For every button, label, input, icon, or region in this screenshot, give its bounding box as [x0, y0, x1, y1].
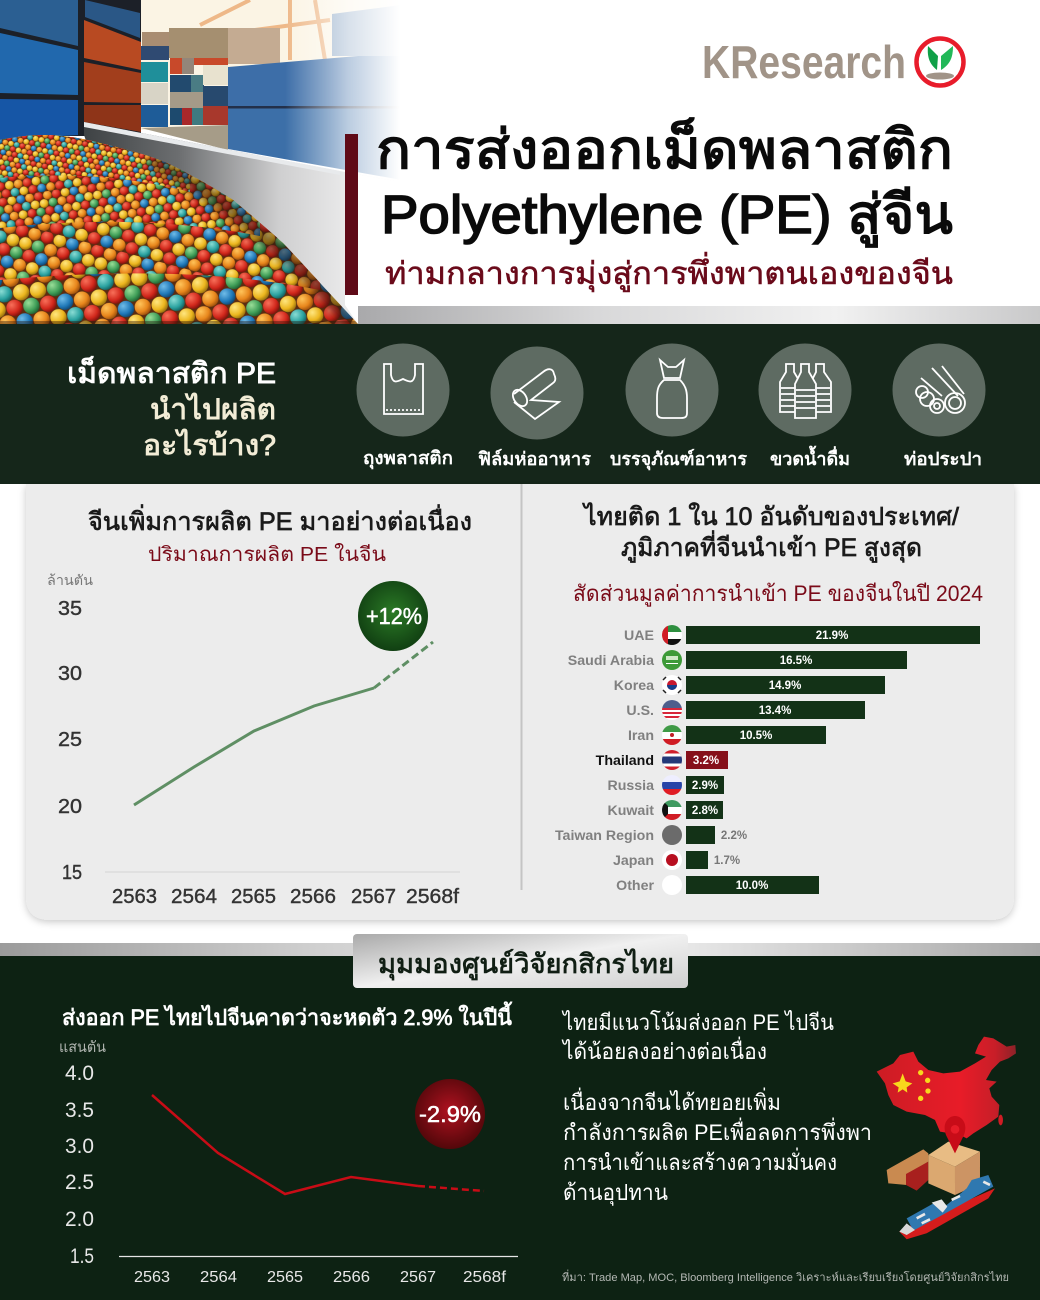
icon: water pipes	[892, 344, 986, 436]
text block: outlook: การนำเข้าและสร้างความมั่นคง	[563, 1147, 837, 1175]
line chart: China PE production: 2563	[112, 886, 157, 908]
icon labels: ถุงพลาสติก	[363, 448, 453, 470]
line chart: China PE production: 20	[58, 796, 82, 818]
panel: KResearch view	[0, 956, 1040, 1300]
illustration: China map, parcel and cargo ship	[877, 1037, 1016, 1239]
line chart: Thai PE exports to China: 3.5	[65, 1099, 94, 1122]
line chart: China PE production: 2564	[171, 886, 217, 908]
line chart: China PE production: ล้านตัน	[47, 572, 93, 588]
value labels: 16.5%	[780, 655, 812, 667]
text block: outlook: ได้น้อยลงอย่างต่อเนื่อง	[561, 1036, 767, 1064]
value labels: 10.0%	[736, 880, 768, 892]
icon labels: ฟิล์มห่ออาหาร	[478, 448, 591, 469]
line chart: China PE production: 2566	[290, 886, 336, 908]
value labels: 2.8%	[692, 805, 718, 817]
line chart: Thai PE exports to China: 3.0	[65, 1135, 94, 1158]
callout: -2.9%: -2.9%	[419, 1101, 481, 1127]
country labels: Korea	[614, 678, 654, 694]
section label: มุมมองศูนย์วิจัยกสิกรไทย	[378, 948, 674, 981]
title: Polyethylene (PE) สู่จีน	[381, 185, 953, 247]
icon: food packaging bag	[626, 344, 718, 436]
chart heading: China production	[88, 504, 472, 566]
icon labels: บรรจุภัณฑ์อาหาร	[610, 448, 747, 471]
text block: outlook	[561, 1010, 872, 1206]
bars	[686, 626, 980, 894]
icon: food wrap film	[490, 346, 584, 440]
section label	[353, 934, 688, 988]
text block: outlook: เนื่องจากจีนได้ทยอยเพิ่ม	[563, 1087, 781, 1115]
line chart: Thai PE exports to China	[59, 1039, 518, 1286]
icon labels	[363, 445, 982, 471]
country labels: Russia	[607, 778, 654, 794]
callout: +12%: +12%	[366, 603, 422, 629]
line chart: Thai PE exports to China: 2567	[400, 1269, 436, 1286]
chart heading: Thailand top 10: ไทยติด 1 ใน 10 อันดับของประเทศ/	[582, 502, 959, 531]
value labels: 13.4%	[759, 705, 791, 717]
chart heading: China production: จีนเพิ่มการผลิต PE มาอย่างต่อเนื่อง	[88, 504, 472, 536]
icon labels: ท่อประปา	[904, 449, 982, 469]
country labels	[555, 628, 654, 894]
line chart: Thai PE exports to China: 2563	[134, 1269, 170, 1286]
line chart: Thai PE exports to China: 2568f	[463, 1269, 507, 1286]
icon: plastic bag	[356, 344, 450, 436]
country labels: Taiwan Region	[555, 828, 654, 844]
line chart: Thai PE exports to China: แสนตัน	[59, 1039, 106, 1056]
subtitle: ท่ามกลางการมุ่งสู่การพึ่งพาตนเองของจีน	[385, 252, 953, 293]
steel band: lower section	[0, 943, 1040, 956]
question heading	[67, 355, 276, 462]
chart heading: Thai exports to China: ส่งออก PE ไทยไปจีนคาดว่าจะหดตัว 2.9% ในปีนี้	[62, 1002, 512, 1030]
text block: outlook: กำลังการผลิต PEเพื่อลดการพึ่งพา	[563, 1117, 872, 1145]
steel band	[358, 306, 1040, 324]
line chart: China PE production: 25	[58, 729, 82, 751]
line chart: China PE production: 2567	[351, 886, 396, 908]
chart heading: China production: ปริมาณการผลิต PE ในจีน	[148, 543, 386, 566]
icon: China map	[877, 1037, 1016, 1138]
value labels: 2.9%	[692, 780, 718, 792]
country labels: Saudi Arabia	[568, 653, 654, 669]
value labels: 3.2%	[693, 755, 719, 767]
value labels: 2.2%	[721, 830, 747, 842]
country labels: Japan	[613, 853, 654, 869]
title accent bar	[345, 134, 358, 295]
line chart: China PE production: 2565	[231, 886, 276, 908]
title: การส่งออกเม็ดพลาสติก	[376, 118, 953, 180]
callout: -2.9%	[415, 1079, 485, 1149]
chart heading: Thailand top 10: สัดส่วนมูลค่าการนำเข้า PE ของจีนในปี 2024	[573, 581, 983, 607]
line chart: Thai PE exports to China: 2566	[333, 1269, 370, 1286]
value labels: 21.9%	[816, 630, 848, 642]
chart heading: Thailand top 10: ภูมิภาคที่จีนนำเข้า PE สูงสุด	[621, 530, 922, 563]
line chart: Thai PE exports to China: 1.5	[70, 1245, 94, 1268]
country labels: UAE	[624, 628, 654, 644]
logo: KResearch: KResearch	[702, 36, 906, 88]
country labels: U.S.	[626, 703, 654, 719]
panel: uses of PE	[0, 324, 1040, 484]
chart heading: Thailand top 10	[573, 502, 983, 607]
line chart: Thai PE exports to China: 4.0	[65, 1062, 94, 1085]
line chart: China PE production: 30	[58, 663, 82, 685]
line chart: Thai PE exports to China: 2.0	[65, 1208, 94, 1231]
line chart: China PE production: 2568f	[406, 886, 459, 908]
value labels: 10.5%	[740, 730, 772, 742]
icon labels: ขวดน้ำดื่ม	[770, 445, 850, 469]
icon: cargo ship	[899, 1175, 995, 1239]
source note: ที่มา: Trade Map, MOC, Bloomberg Intelligence วิเคราะห์และเรียบเรียงโดยศูนย์วิจัยกสิกรไทย	[562, 1269, 1009, 1284]
value labels: 1.7%	[714, 855, 740, 867]
country labels: Other	[616, 878, 654, 894]
hero photo: containers and plastic pellets	[0, 0, 394, 324]
bar chart: share of China's PE imports	[555, 625, 980, 895]
line chart: China PE production: 35	[58, 598, 82, 620]
title	[376, 118, 953, 247]
country labels: Iran	[628, 728, 654, 744]
question heading: นำไปผลิต	[150, 392, 276, 426]
value labels: 14.9%	[769, 680, 801, 692]
flag icons	[662, 625, 682, 895]
icon: parcel box	[928, 1142, 980, 1195]
callout: +12%	[358, 581, 428, 651]
country labels: Kuwait	[607, 803, 654, 819]
line chart: Thai PE exports to China: 2564	[200, 1269, 237, 1286]
text block: outlook: ด้านอุปทาน	[563, 1180, 668, 1206]
question heading: อะไรบ้าง?	[143, 428, 276, 462]
panel: charts	[26, 484, 1014, 920]
icon: water bottles	[758, 344, 852, 436]
line chart: China PE production	[47, 572, 460, 908]
question heading: เม็ดพลาสติก PE	[67, 355, 276, 390]
text block: outlook: ไทยมีแนวโน้มส่งออก PE ไปจีน	[561, 1010, 834, 1035]
line chart: Thai PE exports to China: 2.5	[65, 1171, 94, 1194]
value labels	[692, 630, 848, 892]
icon: location pin	[945, 1116, 965, 1153]
line chart: Thai PE exports to China: 2565	[267, 1269, 303, 1286]
line chart: China PE production: 15	[62, 862, 82, 884]
country labels: Thailand	[596, 753, 654, 769]
icon: containers	[887, 1149, 928, 1191]
